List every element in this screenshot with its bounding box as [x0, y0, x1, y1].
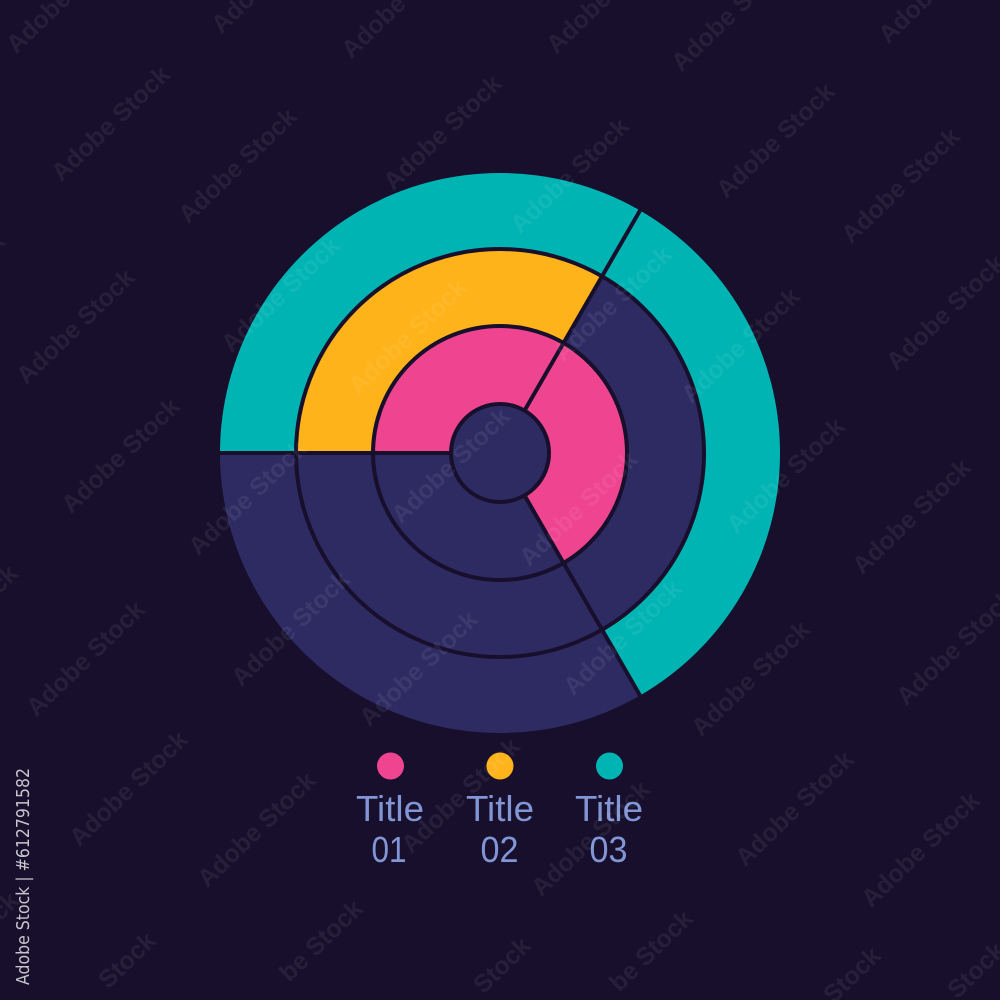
- watermark pattern: Adobe Stock: [686, 616, 815, 742]
- watermark pattern: Stock: [93, 927, 161, 994]
- watermark pattern: Adobe Stock: [226, 566, 355, 692]
- inner ring: title 01 segments: [373, 326, 627, 580]
- watermark pattern: Adobe Stock: [183, 435, 312, 561]
- watermark pattern: Adobe Stock: [11, 264, 140, 390]
- legend item: title 01: 01: [372, 829, 406, 870]
- watermark pattern: Adobe Stock: [856, 787, 985, 913]
- watermark pattern: Adobe Stock: [216, 232, 345, 358]
- watermark pattern: Adobe Stock: [192, 767, 321, 893]
- watermark pattern: Adobe Stock: [836, 123, 965, 249]
- watermark pattern: Adobe Stock: [354, 606, 483, 732]
- legend item: title 03: Title: [575, 788, 643, 829]
- legend item: title 02: 02: [480, 829, 518, 870]
- watermark pattern: Adobe Stock: [676, 283, 805, 409]
- watermark pattern: be Stock: [274, 895, 368, 987]
- watermark pattern: Adobe Stock: [343, 274, 472, 400]
- legend: [356, 752, 643, 870]
- watermark pattern: Adobe Stock: [514, 446, 643, 572]
- watermark pattern: Adobe Stock: [721, 413, 850, 539]
- watermark pattern: Adobe Stock: [378, 70, 507, 196]
- watermark pattern: Adobe Stock: [711, 78, 840, 204]
- watermark pattern: Adobe Stock: [173, 103, 302, 229]
- outer ring: title 03 segments: [220, 173, 780, 733]
- legend item: title 02: [466, 752, 534, 870]
- watermark pattern: Adobe Stock: [46, 61, 175, 187]
- radial chart: [218, 173, 780, 733]
- watermark pattern: Adobe Stock: [386, 403, 515, 529]
- stock id caption: Adobe Stock | #612791582: [13, 768, 34, 985]
- middle ring: title 02 segments: [296, 249, 704, 657]
- center circle: [451, 404, 549, 502]
- watermark pattern: Adobe Stock: [56, 393, 185, 519]
- legend item: title 03: 03: [590, 829, 628, 870]
- legend item: title 02: Title: [466, 788, 534, 829]
- watermark pattern: Adobe Stock: [847, 454, 976, 580]
- watermark pattern: be Stock: [604, 905, 698, 997]
- watermark pattern: Stock: [468, 932, 536, 999]
- legend item: title 01: [356, 752, 424, 870]
- watermark pattern: Adobe Stock: [730, 746, 859, 872]
- legend item: title 03: [575, 752, 643, 870]
- watermark pattern: Adobe Stock: [21, 596, 150, 722]
- watermark pattern: Adobe Stock: [396, 733, 525, 859]
- watermark pattern: Adobe Stock: [558, 575, 687, 701]
- watermark pattern: Adobe Stock: [64, 726, 193, 852]
- watermark pattern: Adobe Stock: [526, 776, 655, 902]
- legend item: title 01: Title: [356, 788, 424, 829]
- watermark pattern: Adobe Stock: [505, 113, 634, 239]
- watermark pattern: Adobe Stock: [548, 241, 677, 367]
